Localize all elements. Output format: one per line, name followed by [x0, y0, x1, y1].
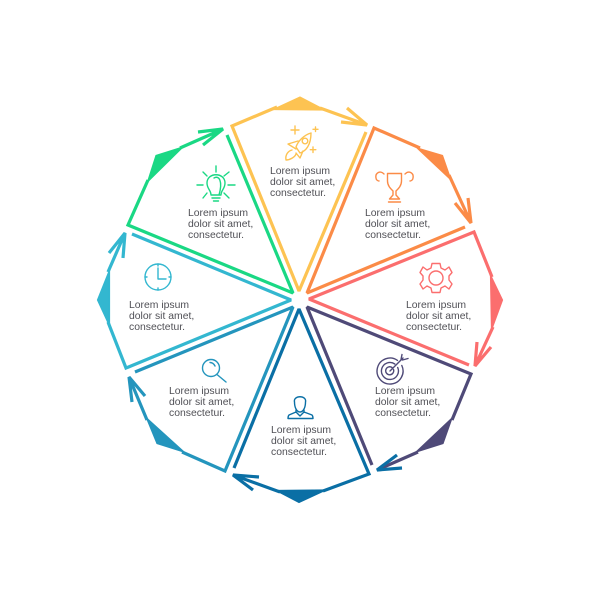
dark tab	[416, 418, 452, 452]
panel: green segment	[128, 129, 293, 293]
mid blue outline and arrow	[129, 307, 293, 471]
icon: person	[288, 397, 313, 418]
text: mid blue segment: consectetur.	[169, 408, 225, 419]
icon: light bulb	[197, 166, 235, 201]
text: mid blue segment: dolor sit amet,	[169, 397, 234, 408]
red tab	[490, 275, 502, 330]
mid blue tab	[146, 418, 184, 452]
text: red segment: dolor sit amet,	[406, 311, 471, 322]
panel: dark purple segment	[307, 307, 471, 470]
text: blue segment: dolor sit amet,	[271, 436, 336, 447]
text: red segment: consectetur.	[406, 322, 462, 333]
orange outline and arrow	[307, 128, 471, 293]
blue outline and arrow	[233, 309, 369, 492]
text: dark segment: consectetur.	[375, 408, 431, 419]
icon: trophy	[376, 172, 413, 202]
dark outline and arrow	[307, 307, 471, 470]
cyan outline and arrow	[108, 233, 291, 368]
yellow outline and arrow	[232, 107, 367, 291]
panel: red segment	[309, 232, 502, 366]
text: blue segment: Lorem ipsum	[271, 425, 331, 436]
dark arrow head	[377, 455, 402, 470]
blue tab	[276, 490, 326, 502]
orange tab	[417, 148, 451, 180]
text: mid blue segment: Lorem ipsum	[169, 386, 229, 397]
text: orange segment: Lorem ipsum	[365, 208, 425, 219]
panel: orange segment	[307, 128, 471, 293]
green tab	[148, 147, 183, 182]
text: blue segment: consectetur.	[271, 447, 327, 458]
icon: gear	[420, 264, 452, 292]
icon: rocket	[286, 126, 318, 160]
text: dark segment: Lorem ipsum	[375, 386, 435, 397]
text: yellow segment: dolor sit amet,	[270, 177, 335, 188]
text: orange segment: dolor sit amet,	[365, 219, 430, 230]
cyan tab	[98, 270, 110, 326]
text: dark segment: dolor sit amet,	[375, 397, 440, 408]
icon: target	[377, 354, 408, 384]
red outline and arrow	[309, 232, 493, 366]
text: green segment: consectetur.	[188, 230, 244, 241]
text: cyan segment: dolor sit amet,	[129, 311, 194, 322]
text: cyan segment: Lorem ipsum	[129, 300, 189, 311]
text: yellow segment: consectetur.	[270, 188, 326, 199]
yellow tab	[273, 97, 325, 110]
green outline and arrow	[128, 129, 293, 293]
panel: blue segment	[233, 309, 369, 502]
icon: clock	[145, 264, 171, 290]
icon: magnifier	[202, 360, 226, 382]
panel: cyan segment	[98, 233, 291, 368]
panel: yellow segment	[232, 97, 367, 291]
panel: mid blue segment	[129, 307, 293, 471]
text: orange segment: consectetur.	[365, 230, 421, 241]
text: yellow segment: Lorem ipsum	[270, 166, 330, 177]
text: cyan segment: consectetur.	[129, 322, 185, 333]
text: green segment: dolor sit amet,	[188, 219, 253, 230]
text: red segment: Lorem ipsum	[406, 300, 466, 311]
text: green segment: Lorem ipsum	[188, 208, 248, 219]
